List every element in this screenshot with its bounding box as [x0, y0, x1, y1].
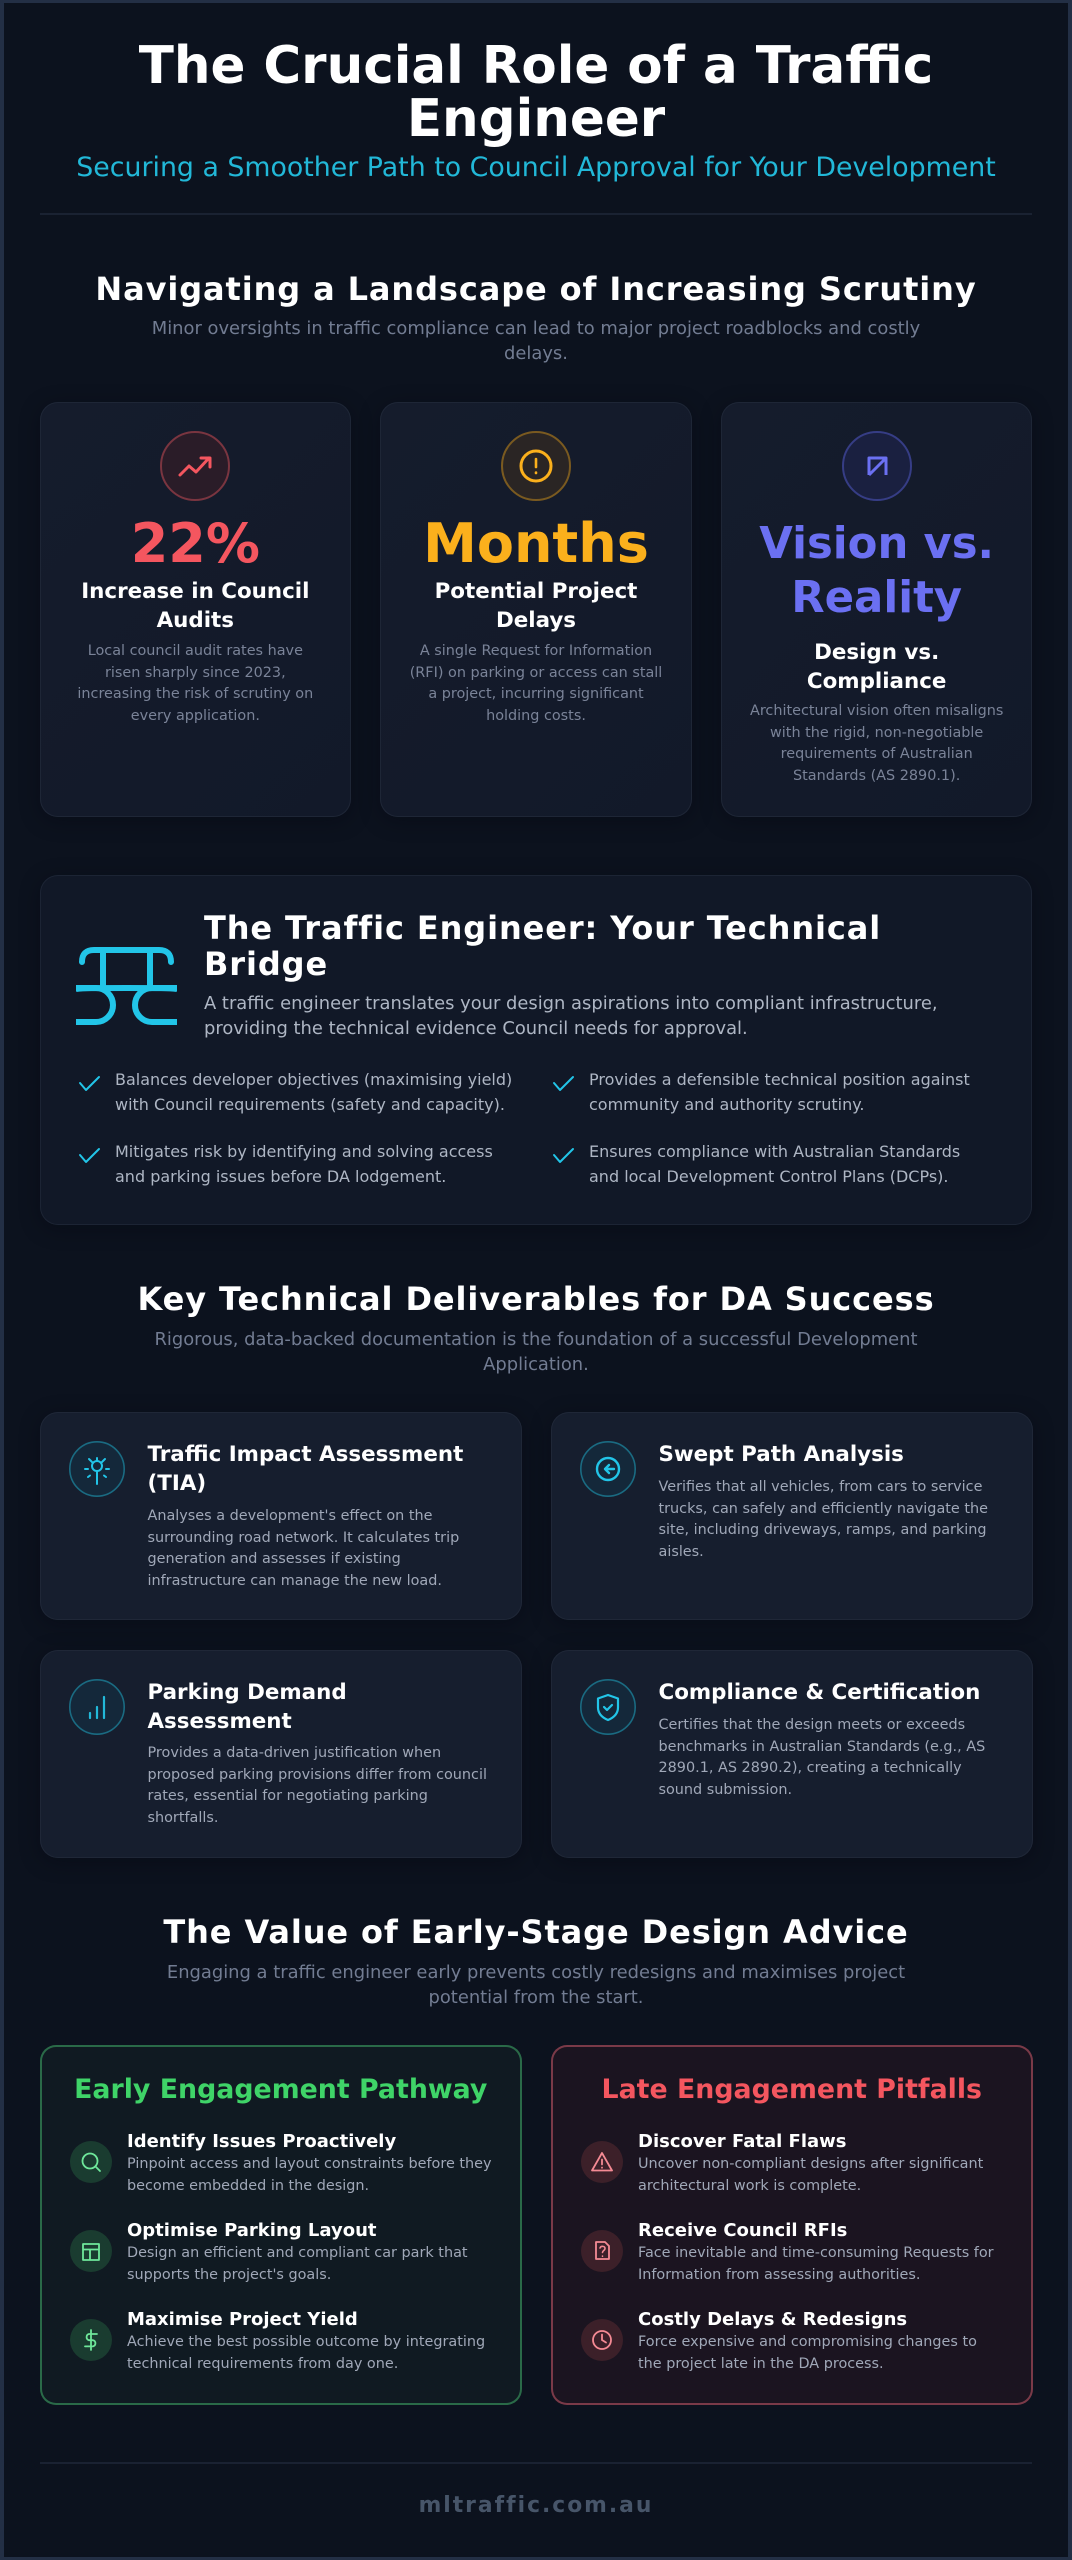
card heading: Assessment	[148, 1709, 292, 1734]
icon: shield check	[580, 1679, 636, 1735]
intro: early advice section: potential from the start.	[428, 1987, 644, 2008]
item heading: Optimise Parking Layout	[127, 2220, 376, 2241]
stat description: Standards (AS 2890.1).	[793, 768, 960, 784]
title: The Crucial Role of a Traffic	[139, 36, 933, 96]
item description: Face inevitable and time-consuming Requests for	[638, 2245, 994, 2261]
footer url: mltraffic.com.au	[419, 2493, 653, 2518]
stat description: requirements of Australian	[781, 746, 973, 762]
icon: warning triangle	[581, 2141, 623, 2183]
icon: check	[553, 1076, 574, 1091]
stat description: every application.	[131, 708, 260, 724]
list item: balances	[79, 1070, 512, 1114]
panel: stat 22%	[40, 402, 351, 817]
card heading	[148, 1680, 347, 1734]
item description: Design an efficient and compliant car park that	[127, 2245, 468, 2261]
item text	[115, 1070, 512, 1114]
item description: Information from assessing authorities.	[638, 2266, 920, 2282]
item description: the project late in the DA process.	[638, 2356, 884, 2372]
card heading: Traffic Impact Assessment	[148, 1442, 463, 1467]
card description: benchmarks in Australian Standards (e.g., AS	[658, 1738, 985, 1754]
item text: and parking issues before DA lodgement.	[115, 1167, 446, 1186]
panel: stat vision vs reality	[721, 402, 1032, 817]
stat description	[77, 643, 313, 724]
item description: technical requirements from day one.	[127, 2356, 398, 2372]
item heading: Maximise Project Yield	[127, 2309, 358, 2330]
card description: 2890.1, AS 2890.2), creating a technically	[658, 1760, 962, 1776]
item description: Uncover non-compliant designs after significant	[638, 2156, 983, 2172]
panel: traffic impact assessment	[40, 1412, 522, 1620]
intro: deliverables section: Rigorous, data-backed documentation is the foundation of a successful Development	[154, 1329, 918, 1350]
footer divider	[40, 2462, 1032, 2464]
item text	[115, 1142, 493, 1186]
intro: deliverables section	[154, 1329, 918, 1375]
list item: mitigates	[79, 1142, 493, 1186]
intro: scrutiny section	[152, 318, 920, 364]
stat description: Architectural vision often misaligns	[750, 703, 1003, 719]
stat description: risen sharply since 2023,	[105, 664, 286, 680]
item text: with Council requirements (safety and capacity).	[115, 1095, 505, 1114]
intro: scrutiny section: delays.	[504, 343, 568, 364]
item description	[127, 2243, 468, 2286]
panel description	[204, 993, 938, 1039]
icon: bar chart	[69, 1679, 125, 1735]
item heading: Costly Delays & Redesigns	[638, 2309, 907, 2330]
stat heading	[435, 579, 637, 633]
stat heading: Potential Project	[435, 579, 637, 604]
icon: layout	[70, 2230, 112, 2272]
icon: clock	[581, 2319, 623, 2361]
item text: Provides a defensible technical position against	[589, 1070, 970, 1089]
icon: check	[79, 1076, 100, 1091]
card description: Analyses a development's effect on the	[148, 1508, 432, 1524]
card description: surrounding road network. It calculates trip	[148, 1530, 459, 1546]
card description: infrastructure can manage the new load.	[148, 1572, 442, 1588]
card description: Verifies that all vehicles, from cars to service	[658, 1479, 982, 1495]
icon: arrow up right square	[842, 431, 912, 501]
panel heading	[204, 909, 881, 983]
stat heading: Design vs.	[814, 640, 939, 665]
item description	[638, 2154, 983, 2197]
intro: deliverables section: Application.	[483, 1354, 589, 1375]
item description	[127, 2332, 485, 2375]
item: fatal flaws	[551, 2130, 1032, 2200]
intro: early advice section	[167, 1962, 905, 2008]
card description	[658, 1479, 988, 1560]
item heading: Identify Issues Proactively	[127, 2131, 396, 2152]
item: maximise yield	[40, 2308, 522, 2378]
stat description: increasing the risk of scrutiny on	[77, 686, 313, 702]
intro: scrutiny section: Minor oversights in traffic compliance can lead to major project roadblocks and costly	[152, 318, 920, 339]
item description: Force expensive and compromising changes to	[638, 2334, 977, 2350]
stat description: Local council audit rates have	[88, 643, 303, 659]
icon: traffic signal	[69, 1441, 125, 1497]
panel heading: Late Engagement Pitfalls	[602, 2074, 982, 2105]
stat description	[750, 703, 1003, 784]
list item: defensible	[553, 1070, 970, 1114]
stat description: with the rigid, non-negotiable	[770, 724, 983, 740]
icon: trending up	[160, 431, 230, 501]
list item: ensures	[553, 1142, 960, 1186]
stat value: Vision vs.	[759, 519, 994, 569]
card description: aisles.	[658, 1544, 704, 1560]
icon: circle arrow	[580, 1441, 636, 1497]
item description: become embedded in the design.	[127, 2178, 369, 2194]
item text: Mitigates risk by identifying and solving access	[115, 1142, 493, 1161]
panel: compliance and certification	[551, 1650, 1033, 1858]
stat heading: Delays	[496, 608, 576, 633]
icon: check	[79, 1148, 100, 1163]
icon: alert circle	[501, 431, 571, 501]
stat heading: Increase in Council	[81, 579, 309, 604]
card description: site, including driveways, ramps, and parking	[658, 1522, 987, 1538]
card description	[148, 1745, 487, 1826]
stat description	[410, 643, 662, 724]
card heading: Parking Demand	[148, 1680, 347, 1705]
icon: bridge	[76, 947, 177, 1025]
item: council rfis	[551, 2219, 1032, 2289]
item: optimise parking	[40, 2219, 522, 2289]
item: costly delays	[551, 2308, 1032, 2378]
stat value: Months	[423, 512, 649, 575]
stat value: Reality	[791, 573, 962, 623]
card heading: Swept Path Analysis	[658, 1442, 904, 1467]
card description: proposed parking provisions differ from council	[148, 1766, 487, 1782]
card description: Certifies that the design meets or exceeds	[658, 1717, 965, 1733]
icon: dollar	[70, 2319, 112, 2361]
panel: stat months	[380, 402, 692, 817]
card description: rates, essential for negotiating parking	[148, 1788, 428, 1804]
panel description: providing the technical evidence Council needs for approval.	[204, 1018, 748, 1039]
item text	[589, 1070, 970, 1114]
heading: early advice section: The Value of Early-Stage Design Advice	[163, 1913, 909, 1951]
stat heading	[81, 579, 309, 633]
item description: supports the project's goals.	[127, 2266, 331, 2282]
item description: Pinpoint access and layout constraints before they	[127, 2156, 492, 2172]
item heading: Receive Council RFIs	[638, 2220, 847, 2241]
item description: Achieve the best possible outcome by integrating	[127, 2334, 485, 2350]
stat value: 22%	[131, 512, 260, 575]
stat value	[759, 519, 994, 623]
intro: early advice section: Engaging a traffic engineer early prevents costly redesigns and maximises project	[167, 1962, 905, 1983]
heading: scrutiny section: Navigating a Landscape of Increasing Scrutiny	[95, 270, 977, 308]
panel heading: Bridge	[204, 945, 328, 983]
item: identify issues	[70, 2131, 492, 2194]
panel heading: The Traffic Engineer: Your Technical	[204, 909, 881, 947]
header divider	[40, 213, 1032, 215]
item description	[127, 2154, 492, 2197]
card heading: (TIA)	[148, 1471, 206, 1496]
title: Engineer	[407, 89, 665, 149]
panel: parking demand assessment	[40, 1650, 522, 1858]
heading: deliverables section: Key Technical Deliverables for DA Success	[137, 1280, 935, 1318]
stat heading	[807, 640, 946, 694]
card heading: Compliance & Certification	[658, 1680, 980, 1705]
stat description: A single Request for Information	[420, 643, 652, 659]
stat heading: Compliance	[807, 669, 946, 694]
item description	[638, 2243, 994, 2286]
item text: Balances developer objectives (maximising yield)	[115, 1070, 512, 1089]
item text: community and authority scrutiny.	[589, 1095, 864, 1114]
card description: Provides a data-driven justification when	[148, 1745, 441, 1761]
item text: Ensures compliance with Australian Standards	[589, 1142, 960, 1161]
item text	[589, 1142, 960, 1186]
card description	[658, 1717, 985, 1798]
panel: swept path analysis	[551, 1412, 1033, 1620]
stat description: (RFI) on parking or access can stall	[410, 664, 662, 680]
stat heading: Audits	[157, 608, 234, 633]
panel: early engagement pathway	[40, 2045, 522, 2405]
item text: and local Development Control Plans (DCPs).	[589, 1167, 948, 1186]
card description: generation and assesses if existing	[148, 1551, 401, 1567]
item heading: Discover Fatal Flaws	[638, 2131, 846, 2152]
card description	[148, 1508, 459, 1588]
panel heading: Early Engagement Pathway	[74, 2074, 487, 2105]
item description	[638, 2332, 977, 2375]
panel description: A traffic engineer translates your design aspirations into compliant infrastructure,	[204, 993, 938, 1014]
icon: document question	[581, 2230, 623, 2272]
item description: architectural work is complete.	[638, 2178, 861, 2194]
icon: search	[70, 2141, 112, 2183]
icon: check	[553, 1148, 574, 1163]
card description: shortfalls.	[148, 1810, 218, 1826]
stat description: a project, incurring significant	[428, 686, 644, 702]
panel: technical bridge	[40, 875, 1032, 1225]
panel: late engagement pitfalls	[551, 2045, 1032, 2405]
card heading	[148, 1442, 463, 1496]
stat description: holding costs.	[486, 708, 586, 724]
title	[139, 36, 933, 149]
card description: trucks, can safely and efficiently navigate the	[658, 1500, 988, 1516]
card description: sound submission.	[658, 1782, 792, 1798]
subtitle: Securing a Smoother Path to Council Approval for Your Development	[76, 152, 996, 183]
